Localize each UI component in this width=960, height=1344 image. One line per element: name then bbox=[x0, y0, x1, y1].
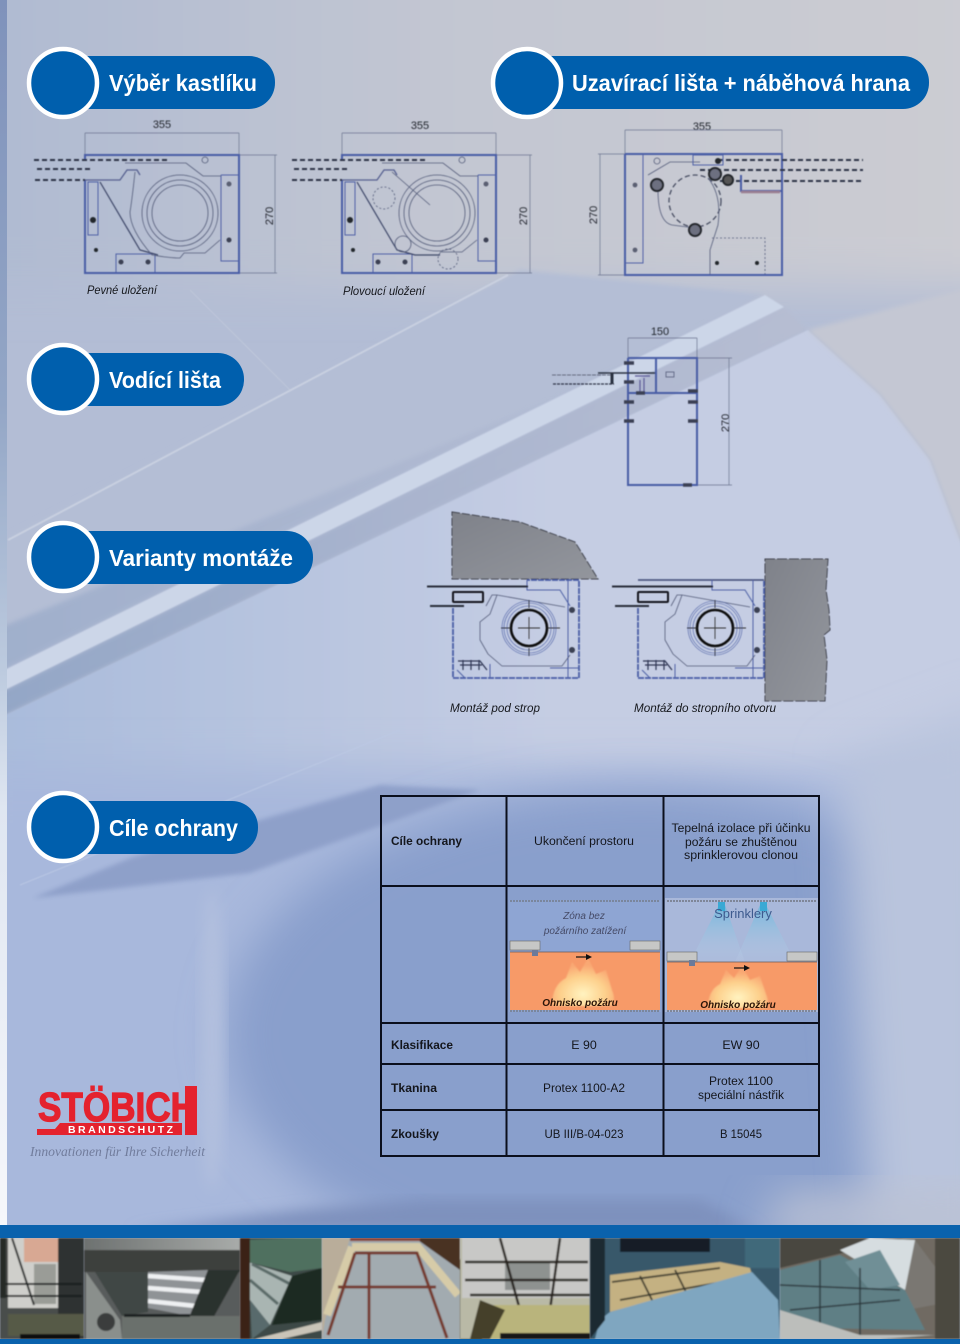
heading: Vodící lišta bbox=[29, 345, 244, 413]
table text: protection goals row: Tepelná izolace při účinku bbox=[672, 821, 811, 835]
sprinkler illustration: sprinkler curtain: Sprinklery bbox=[714, 906, 772, 921]
table text: tests row bbox=[391, 1127, 762, 1141]
logo: Stöbich Brandschutz: STÖBICH bbox=[38, 1084, 196, 1130]
photo 4 bbox=[322, 1238, 482, 1339]
caption: Plovoucí uložení: Plovoucí uložení bbox=[343, 284, 427, 298]
heading: Výběr kastlíku bbox=[29, 49, 275, 117]
photo 2 bbox=[84, 1238, 240, 1339]
heading: Cíle ochrany bbox=[29, 793, 258, 861]
sprinkler illustration: fire zone without load: Ohnisko požáru bbox=[542, 998, 618, 1009]
drawing: mounting under ceiling bbox=[427, 512, 598, 678]
photo 7 bbox=[780, 1238, 960, 1339]
table text: classification row: E 90 bbox=[571, 1038, 597, 1052]
photo 3 bbox=[240, 1238, 322, 1339]
drawing: closing rail bbox=[588, 121, 863, 275]
table text: classification row: EW 90 bbox=[722, 1038, 760, 1052]
logo: Stöbich Brandschutz: BRANDSCHUTZ bbox=[68, 1124, 174, 1136]
heading: Výběr kastlíku: Výběr kastlíku bbox=[109, 70, 257, 96]
table text: classification row: Klasifikace bbox=[391, 1038, 453, 1052]
sprinkler illustration: sprinkler curtain bbox=[665, 898, 819, 1012]
drawing: fixed mounting: 355 bbox=[153, 119, 171, 131]
table text: fabric row: Protex 1100-A2 bbox=[543, 1081, 625, 1095]
table text: protection goals row: požáru se zhuštěnou bbox=[685, 835, 797, 849]
table text: protection goals row bbox=[391, 821, 811, 862]
table text: protection goals row: Ukončení prostoru bbox=[534, 834, 634, 848]
heading: Vodící lišta: Vodící lišta bbox=[109, 367, 221, 393]
table text: tests row: Zkoušky bbox=[391, 1127, 439, 1141]
table text: tests row: UB III/B-04-023 bbox=[544, 1127, 624, 1141]
table text: fabric row bbox=[391, 1074, 785, 1102]
table text: fabric row: Tkanina bbox=[391, 1081, 437, 1095]
table text: protection goals row: Cíle ochrany bbox=[391, 834, 462, 848]
table grid bbox=[381, 796, 819, 1156]
drawing: closing rail: 355 bbox=[693, 121, 711, 133]
drawing: guide rail bbox=[552, 326, 732, 485]
caption: Pevné uložení: Pevné uložení bbox=[87, 283, 159, 297]
table text: tests row: B 15045 bbox=[720, 1127, 762, 1141]
drawing: fixed mounting bbox=[34, 119, 277, 273]
logo: Stöbich Brandschutz bbox=[29, 1084, 206, 1160]
drawing: guide rail: 150 bbox=[651, 326, 669, 338]
sprinkler illustration: fire zone without load bbox=[509, 900, 661, 1012]
heading: Varianty montáže bbox=[29, 523, 313, 591]
drawing: floating mounting: 355 bbox=[411, 120, 429, 132]
caption: Montáž pod strop: Montáž pod strop bbox=[450, 701, 540, 715]
photo 6 bbox=[590, 1238, 780, 1339]
table text: protection goals row: sprinklerovou clonou bbox=[684, 848, 798, 862]
table text: fabric row: Protex 1100 bbox=[709, 1074, 773, 1088]
sprinkler illustration: sprinkler curtain: Ohnisko požáru bbox=[700, 1000, 776, 1011]
drawing: floating mounting bbox=[292, 120, 532, 273]
heading: Varianty montáže: Varianty montáže bbox=[109, 545, 293, 571]
drawing: fixed mounting: 270 bbox=[264, 207, 276, 225]
drawing: closing rail: 270 bbox=[588, 206, 600, 224]
photo strip bbox=[0, 1238, 960, 1339]
bottom blue band bbox=[0, 1225, 960, 1238]
drawing: mounting in ceiling opening bbox=[612, 559, 830, 701]
logo: Stöbich Brandschutz: Innovationen für Ihre Sicherheit bbox=[29, 1145, 206, 1160]
photo 1 bbox=[0, 1238, 84, 1339]
table text: classification row bbox=[391, 1038, 760, 1052]
photo 5 bbox=[460, 1238, 590, 1339]
table text: fabric row: speciální nástřik bbox=[698, 1088, 785, 1102]
heading: Uzavírací lišta + náběhová hrana: Uzavírací lišta + náběhová hrana bbox=[572, 70, 910, 96]
drawing: floating mounting: 270 bbox=[518, 207, 530, 225]
bottom blue edge bbox=[0, 1339, 960, 1344]
sprinkler illustration: fire zone without load: Zóna bez bbox=[562, 911, 605, 922]
drawing: guide rail: 270 bbox=[720, 414, 732, 432]
heading: Uzavírací lišta + náběhová hrana bbox=[493, 49, 929, 117]
caption: Montáž do stropního otvoru: Montáž do stropního otvoru bbox=[634, 701, 776, 715]
protection table bbox=[381, 796, 819, 1156]
heading: Cíle ochrany: Cíle ochrany bbox=[109, 815, 238, 841]
sprinkler illustration: fire zone without load: požárního zatížení bbox=[543, 926, 627, 937]
